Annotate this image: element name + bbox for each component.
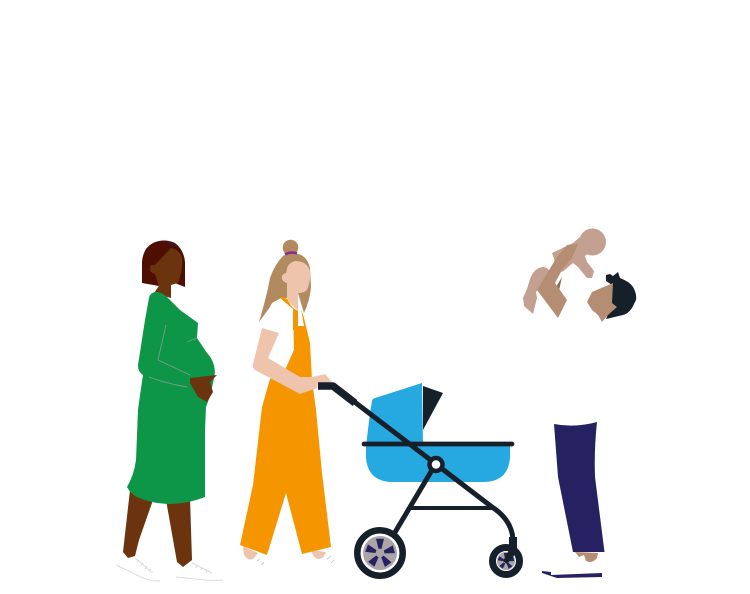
legs [123, 490, 192, 567]
handle grip [318, 386, 355, 403]
father face [587, 283, 617, 322]
feet [243, 546, 326, 560]
dress fold lines [149, 325, 197, 387]
front fork [503, 537, 517, 564]
father hair [606, 272, 636, 319]
overalls [240, 297, 331, 555]
hand on belly [190, 375, 217, 402]
dress [127, 292, 215, 504]
hair bun [283, 240, 298, 255]
foot [575, 552, 598, 562]
large wheel [357, 530, 403, 576]
basket [366, 444, 510, 482]
figure: pregnant woman [116, 240, 223, 581]
orange bib edge [293, 308, 298, 330]
hair clip [167, 242, 177, 246]
baby head [579, 228, 606, 256]
baby legs [523, 267, 551, 314]
icon: shoes [116, 558, 223, 581]
arm and hand [253, 328, 332, 394]
baby body [552, 237, 594, 278]
hair tie [285, 252, 297, 254]
trousers [554, 422, 604, 552]
shadow [553, 277, 562, 295]
white t-shirt [260, 298, 296, 372]
father arm [537, 244, 578, 318]
frame [352, 400, 513, 540]
hair [259, 253, 311, 322]
hair [142, 240, 185, 287]
rim [364, 442, 512, 446]
shoe soles [542, 571, 602, 578]
figure: man lifting baby [523, 228, 636, 578]
head and neck [150, 248, 182, 298]
head and neck [282, 261, 310, 311]
frame joint [430, 458, 442, 471]
small wheel [492, 548, 520, 574]
figure: stroller [318, 383, 520, 576]
toe marks [257, 556, 334, 565]
hood [366, 383, 423, 446]
figure: woman pushing stroller [240, 240, 334, 565]
hood black panel [423, 386, 443, 430]
